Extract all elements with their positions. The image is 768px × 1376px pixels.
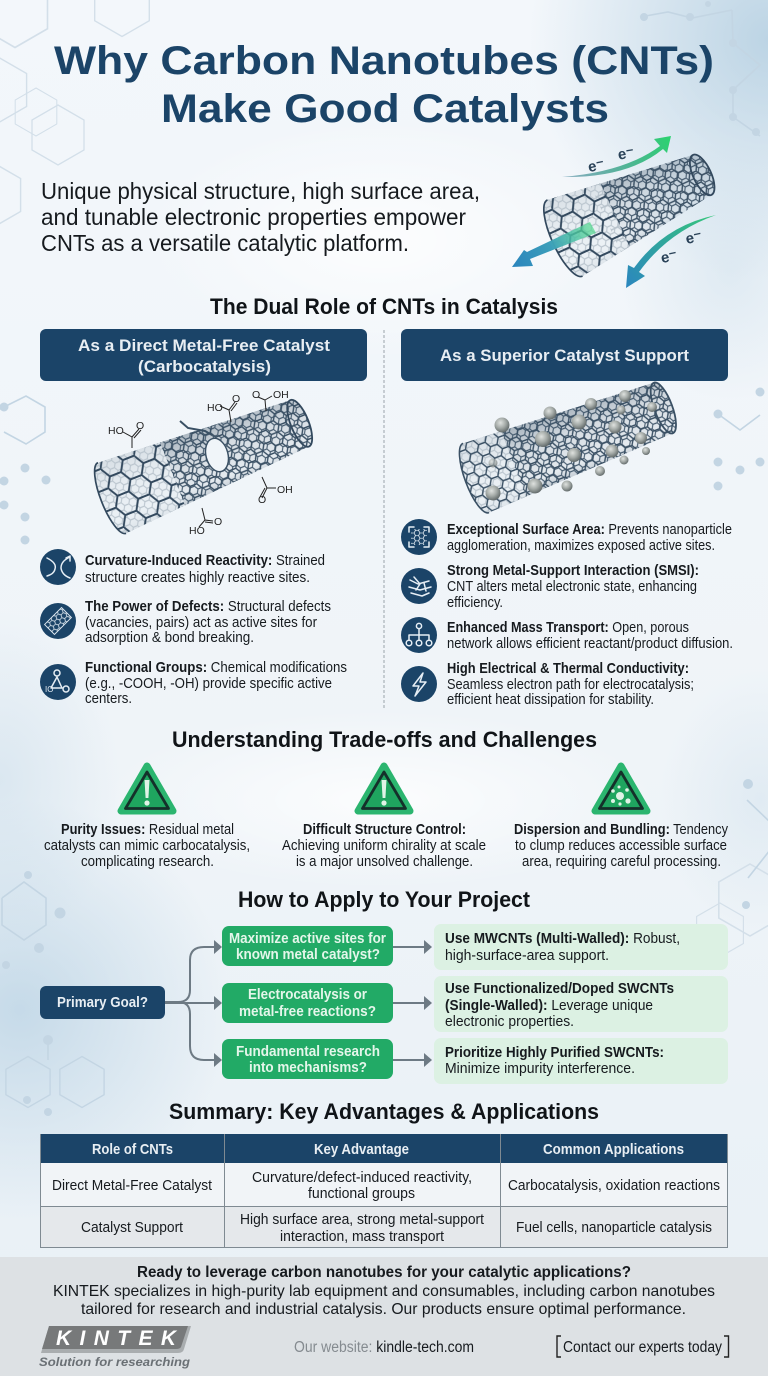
heading: dual role: The Dual Role of CNTs in Catalysis — [210, 294, 558, 319]
panel header — [401, 329, 728, 381]
item: conductivity: Seamless electron path for electrocatalysis; — [447, 676, 694, 693]
icon: blue electron arrow left — [512, 222, 596, 267]
recommendation: Use Functionalized/Doped SWCNTs — [445, 980, 674, 997]
nanotube with functional groups — [94, 391, 314, 534]
question node: into mechanisms? — [249, 1059, 367, 1076]
footer — [0, 1257, 768, 1376]
nanotube with functional groups: O — [232, 393, 240, 405]
panel header — [40, 329, 367, 381]
row 3 — [222, 1038, 728, 1084]
intro text: Unique physical structure, high surface area, — [41, 178, 480, 204]
challenge: purity: catalysts can mimic carbocatalysis, — [44, 837, 250, 854]
branch arrows — [165, 940, 432, 1067]
table header: Common Applications — [543, 1141, 684, 1158]
question node: metal-free reactions? — [239, 1003, 376, 1020]
electron labels: e⁻ — [684, 228, 704, 248]
challenge: dispersion — [514, 766, 728, 870]
item: mass transport — [401, 617, 733, 653]
challenge: structure control: Difficult Structure Control: — [303, 821, 466, 838]
intro text: CNTs as a versatile catalytic platform. — [41, 230, 409, 256]
question node: Maximize active sites for — [229, 930, 386, 947]
table header: Key Advantage — [314, 1141, 409, 1158]
item: surface area: agglomeration, maximizes exposed active sites. — [447, 537, 715, 554]
nanotube with functional groups: O — [252, 389, 260, 401]
electron labels: e⁻ — [586, 156, 606, 176]
recommendation: (Single-Walled): Leverage unique — [445, 997, 653, 1014]
item: SMSI: CNT alters metal electronic state, enhancing — [447, 578, 697, 595]
item: conductivity: High Electrical & Thermal Conductivity: — [447, 660, 689, 677]
row: catalyst support: Catalyst Support — [81, 1219, 184, 1236]
row: catalyst support: Fuel cells, nanoparticle catalysis — [516, 1219, 712, 1236]
icon: metal-support interaction — [401, 568, 437, 604]
hero nanotube with electron arrows — [512, 136, 716, 288]
item: conductivity: efficient heat dissipation for stability. — [447, 691, 654, 708]
contact button: Contact our experts today — [563, 1339, 722, 1356]
question node: known metal catalyst? — [236, 946, 380, 963]
panel: challenges — [44, 766, 728, 870]
nanotube with metal nanoparticles — [458, 382, 677, 514]
recommendation: electronic properties. — [445, 1013, 574, 1030]
nanotube with functional groups: OH — [273, 389, 289, 401]
title: Make Good Catalysts — [161, 87, 609, 131]
structural defect hole — [202, 436, 232, 474]
row: catalyst support — [81, 1211, 712, 1245]
row 2 — [222, 976, 728, 1032]
challenge: purity: complicating research. — [81, 853, 214, 870]
start node: primary goal: Primary Goal? — [57, 994, 148, 1011]
start node: primary goal — [40, 986, 165, 1019]
intro text — [41, 178, 480, 256]
nanotube with functional groups: O — [136, 420, 144, 432]
item: surface area: Exceptional Surface Area: Prevents nanoparticle — [447, 521, 732, 538]
nanotube with functional groups: OH — [277, 484, 293, 496]
icon: curvature — [40, 549, 76, 585]
item: defects: adsorption & bond breaking. — [85, 629, 254, 646]
row: direct metal-free catalyst — [52, 1169, 720, 1202]
functional group labels — [123, 396, 276, 527]
item: functional groups: (e.g., -COOH, -OH) provide specific active — [85, 675, 332, 692]
intro text: and tunable electronic properties empower — [41, 204, 466, 230]
website: Our website: kindle-tech.com — [294, 1339, 474, 1356]
icon: warning triangle with particles — [595, 766, 647, 811]
item: curvature — [40, 549, 325, 586]
decision flowchart — [40, 924, 728, 1084]
question node — [222, 926, 393, 966]
item: curvature: structure creates highly reactive sites. — [85, 569, 310, 586]
item: curvature: Curvature-Induced Reactivity: Strained — [85, 552, 325, 569]
metal nanoparticles — [486, 390, 657, 500]
nanotube with functional groups: HO — [207, 402, 223, 414]
icon: network — [401, 617, 437, 653]
table header — [40, 1134, 728, 1163]
heading: trade-offs: Understanding Trade-offs and Challenges — [172, 727, 597, 752]
heading: how to apply: How to Apply to Your Project — [238, 887, 531, 912]
logo: KINTEK — [56, 1327, 178, 1350]
challenge: dispersion: Dispersion and Bundling: Tendency — [514, 821, 728, 838]
icon: lightning bolt — [401, 666, 437, 702]
table header: Role of CNTs — [92, 1141, 173, 1158]
recommendation: Minimize impurity interference. — [445, 1060, 635, 1077]
question node — [222, 983, 393, 1023]
challenge: purity: Purity Issues: Residual metal — [61, 821, 234, 838]
item: functional groups: centers. — [85, 690, 132, 707]
panel header: As a Direct Metal-Free Catalyst — [78, 336, 330, 355]
icon: functional groups — [40, 664, 76, 700]
row: catalyst support: interaction, mass transport — [280, 1228, 445, 1245]
challenge: structure control: Achieving uniform chirality at scale — [282, 837, 486, 854]
challenge: structure control: is a major unsolved challenge. — [296, 853, 473, 870]
title — [54, 39, 714, 131]
logo: Solution for researching — [39, 1355, 191, 1369]
nanotube with functional groups: O — [214, 516, 222, 528]
item: SMSI: Strong Metal-Support Interaction (SMSI): — [447, 562, 699, 579]
item: SMSI: efficiency. — [447, 594, 503, 611]
item: surface area — [401, 519, 732, 555]
question node: Electrocatalysis or — [248, 986, 367, 1003]
recommendation — [434, 924, 728, 970]
recommendation: high-surface-area support. — [445, 947, 609, 964]
panel header: (Carbocatalysis) — [138, 357, 271, 376]
logo — [39, 1326, 191, 1369]
nanotube illustration — [542, 154, 716, 278]
row: direct metal-free catalyst: Direct Metal-Free Catalyst — [52, 1177, 213, 1194]
call to action: Ready to leverage carbon nanotubes for your catalytic applications? — [137, 1264, 631, 1281]
panel: direct metal-free catalyst — [40, 329, 367, 707]
item: defects: (vacancies, pairs) act as active sites for — [85, 614, 317, 631]
challenge: dispersion: to clump reduces accessible surface — [515, 837, 727, 854]
nanotube with functional groups: HO — [189, 525, 205, 537]
recommendation — [434, 976, 728, 1032]
electron labels: e⁻ — [617, 144, 636, 164]
item: mass transport: network allows efficient reactant/product diffusion. — [447, 635, 733, 652]
recommendation — [434, 1038, 728, 1084]
item: SMSI — [401, 562, 699, 611]
icon: warning triangle — [121, 766, 173, 811]
row: direct metal-free catalyst: Carbocatalysis, oxidation reactions — [508, 1177, 720, 1194]
icon: electron arrow bottom right — [626, 215, 716, 288]
item: mass transport: Enhanced Mass Transport: Open, porous — [447, 619, 689, 636]
question node — [222, 1039, 393, 1079]
row: direct metal-free catalyst: functional groups — [308, 1185, 415, 1202]
icon: green electron arrow top — [562, 136, 671, 177]
panel header: As a Superior Catalyst Support — [440, 346, 689, 365]
item: functional groups: Functional Groups: Chemical modifications — [85, 659, 347, 676]
nanotube with functional groups: HO — [108, 425, 124, 437]
icon: functional groups: IO — [45, 685, 53, 694]
item: functional groups — [40, 659, 347, 707]
panel: catalyst support — [401, 329, 733, 708]
summary table — [40, 1134, 728, 1248]
call to action: tailored for research and industrial catalysis. Our products ensure optimal performance. — [81, 1301, 686, 1318]
electron labels: e⁻ — [659, 247, 679, 267]
icon: surface area — [401, 519, 437, 555]
recommendation: Use MWCNTs (Multi-Walled): Robust, — [445, 930, 680, 947]
challenge: structure control — [282, 766, 486, 870]
row: catalyst support: High surface area, strong metal-support — [240, 1211, 485, 1228]
challenge: purity — [44, 766, 250, 870]
challenge: dispersion: area, requiring careful processing. — [522, 853, 721, 870]
title: Why Carbon Nanotubes (CNTs) — [54, 39, 714, 83]
call to action: KINTEK specializes in high-purity lab equipment and consumables, including carbon nanotubes — [53, 1283, 715, 1300]
recommendation: Prioritize Highly Purified SWCNTs: — [445, 1044, 664, 1061]
icon: defects — [40, 603, 76, 639]
nanotube with functional groups: O — [258, 494, 266, 506]
call to action — [53, 1264, 715, 1318]
icon: warning triangle — [358, 766, 410, 811]
row: direct metal-free catalyst: Curvature/defect-induced reactivity, — [252, 1169, 472, 1186]
item: defects: The Power of Defects: Structural defects — [85, 598, 331, 615]
item: defects — [40, 598, 331, 646]
heading: summary: Summary: Key Advantages & Applications — [169, 1099, 599, 1124]
question node: Fundamental research — [236, 1043, 380, 1060]
item: conductivity — [401, 660, 694, 708]
row 1 — [222, 924, 728, 970]
electron labels — [586, 144, 704, 267]
